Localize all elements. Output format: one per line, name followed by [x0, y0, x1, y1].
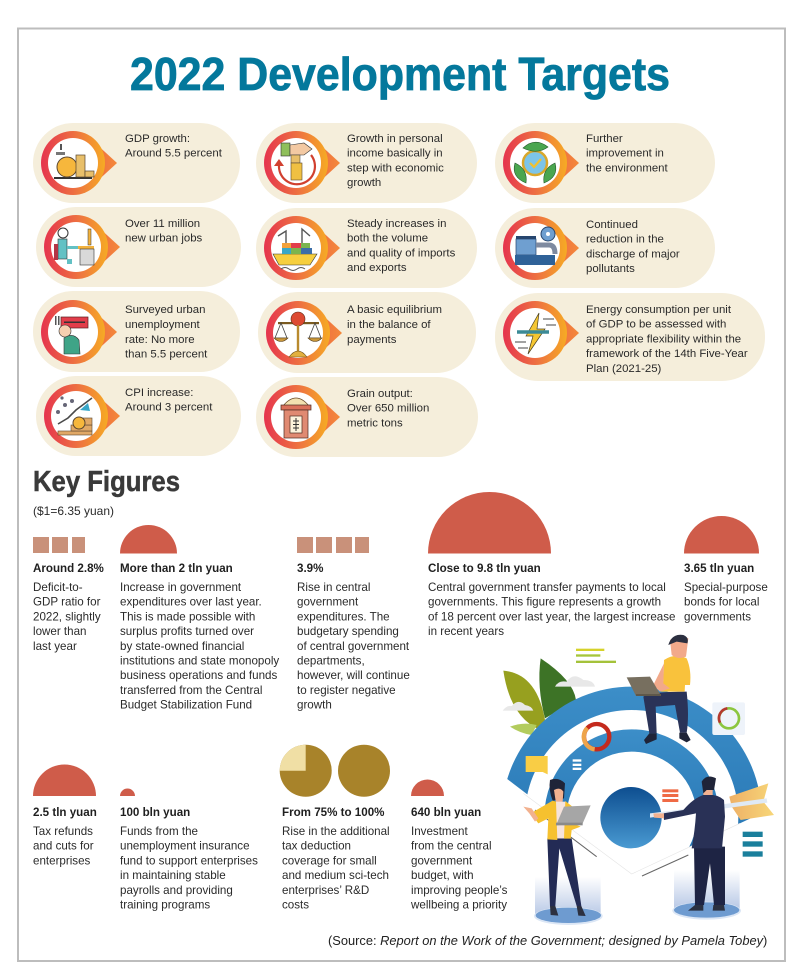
- text: and exports: [347, 262, 407, 274]
- figure: unemployment insurance: Funds from the: [120, 825, 198, 838]
- text: 640 bln yuan: [411, 806, 481, 819]
- icon: grain sack: [264, 385, 340, 449]
- figure: tax refunds: [33, 764, 97, 867]
- figure: government expenditures: transferred from the Central: [120, 684, 262, 697]
- text: 3.9%: [297, 562, 323, 575]
- icon: hand and coins: [264, 131, 340, 195]
- figure: special-purpose bonds: [684, 516, 768, 623]
- center circle: [600, 787, 662, 848]
- pie charts: [280, 745, 390, 797]
- icon: leaves and check: [503, 131, 579, 195]
- text: Growth in personal: [347, 133, 443, 145]
- figure: central expenditures: [297, 537, 410, 712]
- text: More than 2 tln yuan: [120, 562, 233, 575]
- platforms: [534, 870, 741, 925]
- text: Continued: [586, 219, 638, 231]
- menu lines: [573, 759, 763, 857]
- figure: government expenditures: [120, 525, 279, 712]
- figure: unemployment insurance: [120, 789, 258, 912]
- figure: tax deduction: coverage for small: [282, 854, 377, 867]
- arrow: [650, 783, 774, 820]
- semicircle: [120, 789, 135, 796]
- text: income basically in: [347, 148, 443, 160]
- figure: central budget investment: government: [411, 854, 473, 867]
- panel: personal income target: [256, 123, 477, 203]
- figure: unemployment insurance: in maintaining stable: [120, 869, 226, 882]
- text: Further: [586, 133, 623, 145]
- text: Around 3 percent: [125, 402, 213, 414]
- text: framework of the 14th Five-Year: [586, 348, 748, 360]
- icon: office worker: [44, 215, 120, 279]
- callout: [526, 756, 548, 774]
- figure: tax deduction: Rise in the additional: [282, 825, 390, 838]
- figure: central expenditures: of central government: [297, 640, 410, 653]
- person: top man with laptop: [627, 635, 691, 744]
- panel: energy consumption target: [495, 293, 765, 381]
- figure: government expenditures: Increase in government: [120, 581, 241, 594]
- figure: government expenditures: surplus profits turned over: [120, 625, 254, 638]
- figure: tax refunds: enterprises: [33, 854, 91, 867]
- text: From 75% to 100%: [282, 806, 384, 819]
- figure: central expenditures: government: [297, 596, 359, 609]
- text: in the balance of: [347, 319, 431, 331]
- text: metric tons: [347, 417, 403, 429]
- figure: central expenditures: however, will continue: [297, 669, 410, 682]
- clouds: [503, 676, 595, 711]
- text: 100 bln yuan: [120, 806, 190, 819]
- icon: scales: [266, 301, 342, 365]
- figure: central expenditures: Rise in central: [297, 581, 370, 594]
- figure: government expenditures: institutions and state monopoly: [120, 654, 279, 668]
- figure: tax deduction: costs: [282, 898, 309, 912]
- figure: transfer payments: [428, 492, 675, 638]
- panel: pollutants target: [495, 208, 715, 288]
- figure: central expenditures: to register negative: [297, 684, 396, 697]
- figure: transfer payments: in recent years: [428, 625, 504, 638]
- text: reduction in the: [586, 234, 664, 246]
- wedge lines: [523, 793, 740, 874]
- text: Grain output:: [347, 388, 413, 400]
- semicircle: [684, 516, 759, 554]
- title: 2022 Development Targets: [130, 48, 670, 100]
- text: discharge of major: [586, 248, 680, 260]
- text: CPI increase:: [125, 387, 193, 399]
- text: 3.65 tln yuan: [684, 562, 754, 575]
- figure: transfer payments: Central government transfer payments to local: [428, 581, 666, 594]
- icon: three squares: [33, 537, 85, 553]
- icon: energy bolt: [503, 301, 579, 365]
- figure: tax deduction: enterprises’ R&D: [282, 884, 369, 897]
- text: Around 2.8%: [33, 562, 104, 575]
- text: Surveyed urban: [125, 304, 205, 316]
- figure: government expenditures: expenditures over last year.: [120, 596, 262, 609]
- text: unemployment: [125, 319, 201, 331]
- panel: urban jobs target: [36, 207, 241, 287]
- panel: CPI target: [36, 376, 241, 456]
- text: Over 11 million: [125, 218, 200, 230]
- figure: central budget investment: Investment: [411, 825, 468, 838]
- text: GDP growth:: [125, 133, 190, 145]
- figure: deficit ratio: GDP ratio for: [33, 596, 101, 609]
- semicircle: [120, 525, 177, 554]
- person: man pointing: [653, 776, 725, 911]
- figure: government expenditures: Budget Stabilization Fund: [120, 699, 252, 712]
- panel: imports and exports target: [256, 208, 477, 288]
- illustration: business people on data arcs: [502, 635, 774, 947]
- text: both the volume: [347, 233, 428, 245]
- figure: central budget investment: [410, 780, 508, 912]
- figure: tax deduction: [280, 745, 390, 912]
- text: improvement in: [586, 148, 664, 160]
- figure: tax refunds: Tax refunds: [33, 825, 93, 838]
- text: of GDP to be assessed with: [586, 319, 726, 331]
- text: Plan (2021-25): [586, 363, 662, 375]
- figure: deficit ratio: 2022, slightly: [33, 610, 101, 623]
- figure: government expenditures: business operations and funds: [120, 669, 277, 682]
- exchange rate note: ($1=6.35 yuan): [33, 505, 114, 518]
- figure: transfer payments: of 18 percent over last year, the largest increase: [428, 610, 675, 623]
- figure: government expenditures: This is made possible with: [120, 610, 255, 623]
- text: Close to 9.8 tln yuan: [428, 562, 541, 575]
- icon: jobs sign: [41, 300, 117, 364]
- text: new urban jobs: [125, 233, 203, 245]
- figure: central budget investment: improving people’s: [411, 884, 508, 897]
- figure: central expenditures: growth: [297, 699, 332, 712]
- text: Steady increases in: [347, 218, 446, 230]
- text: the environment: [586, 162, 669, 174]
- panel: unemployment rate target: [33, 291, 240, 372]
- arcs: [507, 686, 758, 847]
- heading: Key Figures: Key Figures: [33, 466, 180, 498]
- text: rate: No more: [125, 334, 195, 346]
- text: A basic equilibrium: [347, 304, 442, 316]
- figure: central expenditures: budgetary spending: [297, 625, 399, 638]
- semicircle: [33, 764, 96, 796]
- figure: government expenditures: by state-owned financial: [120, 640, 244, 653]
- panel: balance of payments target: [258, 292, 476, 373]
- text: and quality of imports: [347, 247, 456, 259]
- figure: unemployment insurance: fund to support enterprises: [120, 854, 258, 867]
- text: than 5.5 percent: [125, 348, 208, 360]
- figure: deficit ratio: [33, 537, 104, 653]
- icon: coins: [41, 131, 117, 195]
- text: pollutants: [586, 263, 635, 275]
- red-orange ring: [584, 724, 609, 749]
- panel: environment target: [495, 123, 715, 203]
- figure: special-purpose bonds: bonds for local: [684, 596, 759, 609]
- person: woman with laptop: [523, 779, 591, 916]
- figure: unemployment insurance: training programs: [120, 898, 210, 912]
- figure: central budget investment: wellbeing a priority: [410, 898, 507, 912]
- semicircle: [428, 492, 551, 554]
- leaves: [503, 658, 576, 735]
- figure: unemployment insurance: payrolls and providing: [120, 884, 233, 897]
- figure: special-purpose bonds: governments: [684, 610, 751, 623]
- icon: four squares: [297, 537, 369, 553]
- panel: grain output target: [256, 377, 478, 457]
- figure: central budget investment: from the central: [411, 840, 492, 853]
- text: 2.5 tln yuan: [33, 806, 97, 819]
- figure: tax deduction: and medium sci-tech: [282, 869, 389, 882]
- icon: cargo ship: [264, 216, 340, 280]
- text: step with economic: [347, 162, 444, 174]
- figure: deficit ratio: lower than: [33, 625, 86, 638]
- panel: GDP growth target: [33, 123, 240, 203]
- green ring card: [712, 702, 745, 735]
- text: Around 5.5 percent: [125, 148, 223, 160]
- legend lines top: [576, 649, 616, 663]
- figure: deficit ratio: Deficit-to-: [33, 581, 83, 594]
- figure: transfer payments: governments. This figure represents a growth: [428, 596, 661, 609]
- figure: central expenditures: departments,: [297, 654, 365, 668]
- icon: factory discharge: [503, 216, 579, 280]
- text: payments: [347, 334, 397, 346]
- source line: (Source: Report on the Work of the Government; designed by Pamela Tobey): [328, 933, 767, 948]
- figure: tax deduction: tax deduction: [282, 840, 351, 853]
- figure: special-purpose bonds: Special-purpose: [684, 581, 768, 594]
- figure: unemployment insurance: unemployment insurance: [120, 840, 250, 853]
- text: appropriate flexibility within the: [586, 333, 741, 345]
- figure: tax refunds: and cuts for: [33, 840, 94, 853]
- semicircle: [411, 780, 444, 796]
- text: Energy consumption per unit: [586, 304, 731, 316]
- icon: rising prices: [44, 384, 120, 448]
- text: Over 650 million: [347, 403, 429, 415]
- figure: central budget investment: budget, with: [411, 869, 474, 882]
- text: growth: [347, 177, 381, 189]
- figure: deficit ratio: last year: [33, 640, 77, 653]
- figure: central expenditures: expenditures. The: [297, 610, 390, 623]
